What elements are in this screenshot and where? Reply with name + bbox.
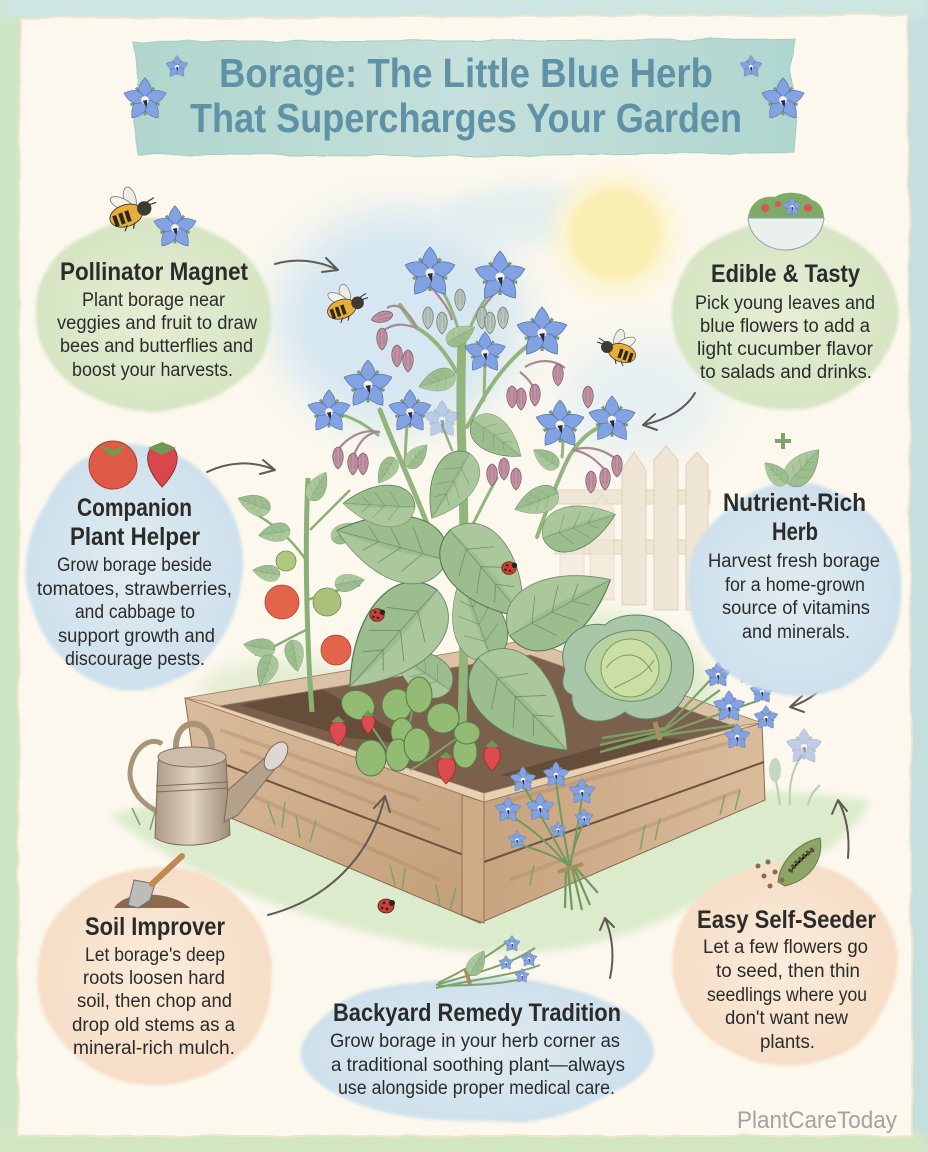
icon: seed pod bbox=[756, 838, 821, 888]
body text bbox=[37, 555, 232, 670]
panel: companion plant helper bbox=[27, 441, 243, 690]
body text: use alongside proper medical care. bbox=[338, 1078, 615, 1099]
back boards bbox=[185, 640, 762, 730]
watering can bbox=[130, 724, 293, 845]
raised garden bed bbox=[185, 640, 765, 923]
strawberry plant bbox=[330, 677, 500, 784]
borage bouquet at bed corner bbox=[494, 761, 598, 910]
body text: a traditional soothing plant—always bbox=[331, 1055, 625, 1076]
sun bbox=[553, 173, 677, 297]
buds bbox=[370, 309, 394, 325]
leaves bbox=[436, 567, 516, 669]
cut borage bunch on bed bbox=[600, 661, 779, 752]
bee: near plant right bbox=[597, 328, 638, 366]
arrows bbox=[207, 258, 849, 978]
body text: tomatoes, strawberries, bbox=[37, 579, 232, 600]
body text: to salads and drinks. bbox=[700, 362, 872, 383]
heading: Soil Improver bbox=[85, 913, 225, 941]
body text: to seed, then thin bbox=[716, 961, 860, 982]
pink curved flower stems bbox=[338, 288, 617, 470]
body text: discourage pests. bbox=[65, 649, 205, 670]
stems bbox=[332, 285, 605, 725]
panel: edible and tasty bbox=[672, 193, 898, 409]
grass tufts bbox=[132, 790, 740, 910]
body text: mineral-rich mulch. bbox=[73, 1038, 235, 1059]
body text: Grow borage beside bbox=[57, 555, 212, 576]
icon: trowel in soil bbox=[114, 856, 190, 908]
ladybugs on leaves bbox=[370, 609, 385, 621]
flowers bbox=[403, 247, 457, 298]
body text bbox=[703, 937, 868, 1053]
body text: drop old stems as a bbox=[72, 1015, 235, 1036]
body text: don't want new bbox=[725, 1008, 848, 1029]
heading bbox=[70, 494, 200, 551]
body text: seedlings where you bbox=[707, 985, 867, 1006]
body text bbox=[708, 551, 880, 643]
body text bbox=[72, 945, 235, 1059]
cabbage bbox=[563, 615, 694, 721]
body text: and minerals. bbox=[742, 622, 850, 643]
heading: Pollinator Magnet bbox=[60, 258, 249, 286]
body text bbox=[57, 290, 257, 381]
fence bbox=[555, 446, 710, 610]
panel: backyard remedy tradition bbox=[299, 935, 653, 1122]
body text: boost your harvests. bbox=[72, 360, 233, 381]
icon: salad bowl bbox=[748, 193, 824, 250]
heading bbox=[723, 489, 866, 546]
icon: tomato and strawberry bbox=[89, 441, 177, 489]
body text: bees and butterflies and bbox=[60, 336, 253, 357]
body text: Plant borage near bbox=[82, 290, 226, 311]
body text: for a home-grown bbox=[725, 575, 865, 596]
body text: Let borage's deep bbox=[85, 945, 225, 966]
icon: leaves with plus bbox=[759, 433, 829, 493]
watermark: PlantCareToday bbox=[737, 1107, 897, 1134]
body text: soil, then chop and bbox=[77, 991, 232, 1012]
body text: plants. bbox=[760, 1032, 815, 1053]
panel: nutrient-rich herb bbox=[688, 433, 902, 696]
icon: bee and flower bbox=[107, 186, 198, 250]
sky watercolor wash bbox=[275, 185, 720, 460]
body text: light cucumber flavor bbox=[697, 339, 874, 360]
heading: Herb bbox=[772, 518, 818, 546]
tomato plant bbox=[235, 468, 366, 712]
body text: Let a few flowers go bbox=[703, 937, 868, 958]
body text: support growth and bbox=[58, 626, 215, 647]
borage plant bbox=[306, 247, 637, 775]
bee: near plant left bbox=[325, 283, 368, 323]
panel: soil improver bbox=[38, 856, 272, 1085]
panel: pollinator magnet bbox=[35, 186, 271, 411]
title: Borage: The Little Blue Herb bbox=[219, 50, 713, 96]
title bbox=[190, 50, 742, 141]
body text: veggies and fruit to draw bbox=[57, 313, 257, 334]
icon: banner flowers bbox=[122, 55, 806, 122]
body text: source of vitamins bbox=[722, 598, 870, 619]
heading: Plant Helper bbox=[70, 523, 200, 551]
heading: Edible & Tasty bbox=[711, 260, 860, 288]
ladybug on ground bbox=[378, 899, 395, 913]
body text bbox=[330, 1031, 625, 1099]
title: That Supercharges Your Garden bbox=[190, 95, 742, 141]
seedling bbox=[769, 729, 823, 805]
heading: Easy Self-Seeder bbox=[697, 906, 876, 934]
left wood face bbox=[185, 698, 484, 923]
soil bbox=[205, 648, 745, 793]
body text: blue flowers to add a bbox=[700, 316, 870, 337]
title banner bbox=[133, 39, 797, 156]
body text: Grow borage in your herb corner as bbox=[330, 1031, 620, 1052]
panel: easy self-seeder bbox=[673, 838, 897, 1065]
heading: Backyard Remedy Tradition bbox=[333, 999, 621, 1027]
body text bbox=[695, 293, 875, 383]
right wood face bbox=[480, 723, 765, 923]
body text: Pick young leaves and bbox=[695, 293, 875, 314]
body text: Harvest fresh borage bbox=[708, 551, 880, 572]
body text: roots loosen hard bbox=[83, 968, 225, 989]
ground grass wash bbox=[110, 613, 870, 953]
heading: Nutrient-Rich bbox=[723, 489, 866, 517]
icon: herb bundle bbox=[436, 935, 540, 988]
body text: and cabbage to bbox=[75, 602, 195, 623]
heading: Companion bbox=[77, 494, 192, 522]
